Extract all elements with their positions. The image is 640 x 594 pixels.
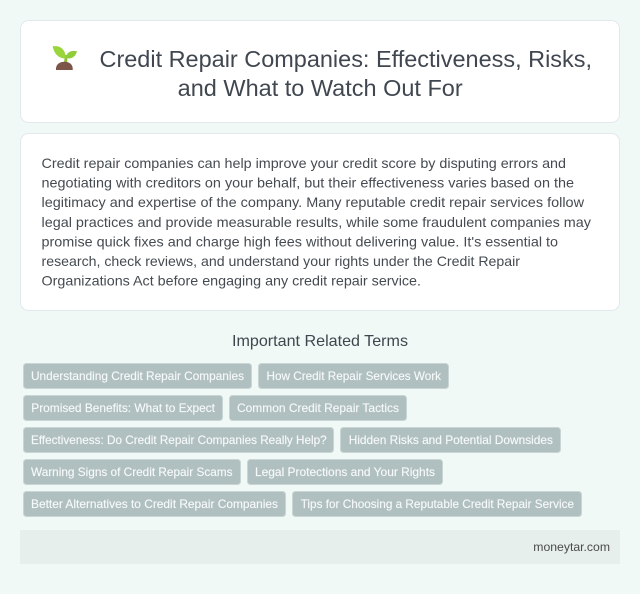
text block: summary paragraph [42, 155, 591, 289]
tag [24, 428, 334, 452]
footer [20, 530, 620, 564]
text block: summary paragraph: promise quick fixes and charge high fees without delivering value. It's essential to [42, 233, 558, 249]
tag: Legal Protections and Your Rights [255, 465, 435, 479]
icon: seedling [53, 46, 77, 70]
tag [24, 460, 240, 484]
tag [230, 396, 406, 420]
tag: Warning Signs of Credit Repair Scams [31, 465, 232, 479]
tag: Better Alternatives to Credit Repair Companies [31, 497, 278, 511]
tag: Hidden Risks and Potential Downsides [349, 433, 553, 447]
text block: summary paragraph: Organizations Act before engaging any credit repair service. [42, 273, 421, 289]
tag [24, 396, 222, 420]
text block: summary paragraph: legal practices and provide measurable results, while some fraudulent companies may [42, 214, 591, 230]
panel: summary text [20, 134, 620, 310]
heading: related terms: Important Related Terms [232, 333, 408, 350]
text block: summary paragraph: Credit repair companies can help improve your credit score by disputing errors and [42, 155, 566, 171]
tag [340, 428, 560, 452]
tag: Common Credit Repair Tactics [237, 401, 399, 415]
panel: related term tags [24, 364, 582, 516]
tag: Tips for Choosing a Reputable Credit Repair Service [301, 497, 574, 511]
tag [292, 492, 582, 516]
title [100, 46, 592, 101]
title: and What to Watch Out For [178, 75, 463, 101]
panel: header [20, 20, 620, 122]
tag: How Credit Repair Services Work [266, 369, 442, 383]
tag [24, 492, 286, 516]
tag: Effectiveness: Do Credit Repair Companies Really Help? [31, 433, 327, 447]
tag [258, 364, 448, 388]
tag: Understanding Credit Repair Companies [31, 369, 244, 383]
tag [24, 364, 252, 388]
text block: summary paragraph: research, check reviews, and understand your rights under the Credit Repair [42, 253, 520, 269]
text block: summary paragraph: legitimacy and expertise of the company. Many reputable credit repair services follow [42, 194, 585, 210]
tag [248, 460, 442, 484]
footer: moneytar.com [533, 540, 610, 554]
title: Credit Repair Companies: Effectiveness, Risks, [100, 46, 592, 72]
tag: Promised Benefits: What to Expect [31, 401, 216, 415]
text block: summary paragraph: negotiating with creditors on your behalf, but their effectiveness varies based on the [42, 175, 574, 191]
